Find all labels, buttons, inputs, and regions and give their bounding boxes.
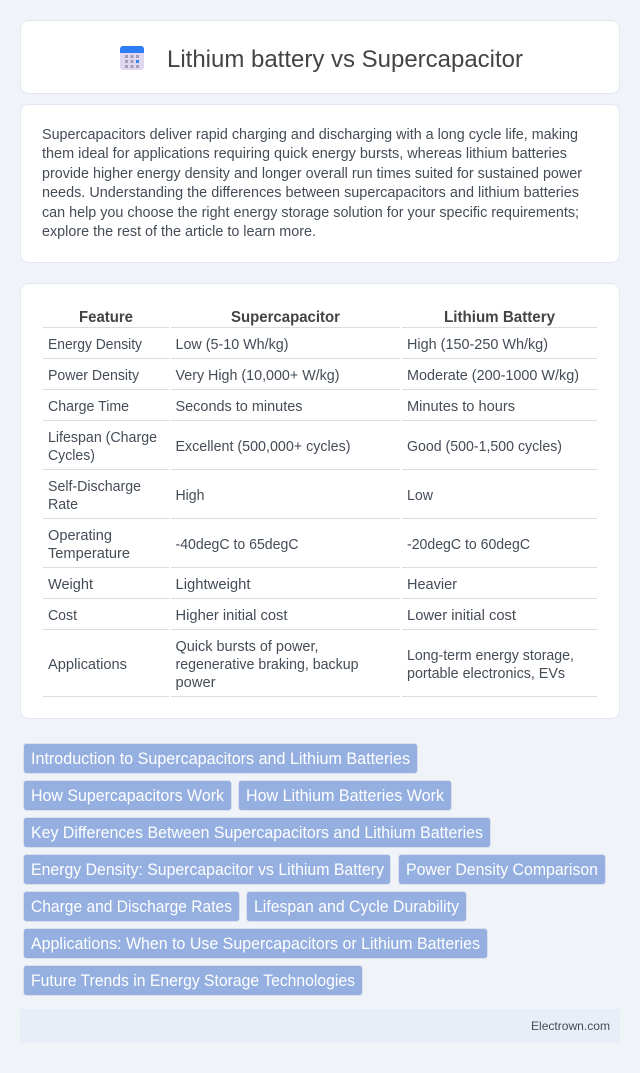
table header: Lithium Battery: [444, 309, 555, 326]
row: applications: Applications: [48, 656, 127, 673]
table header: [79, 309, 555, 326]
intro text: can help you choose the right energy storage solution for your specific requirements;: [42, 204, 579, 221]
row: cost: [48, 607, 517, 624]
intro text: Supercapacitors deliver rapid charging and discharging with a long cycle life, making: [42, 126, 578, 143]
row: charge time: Seconds to minutes: [176, 398, 302, 415]
footer: [20, 1009, 620, 1043]
tag: energy density: Energy Density: Supercapacitor vs Lithium Battery: [31, 861, 385, 879]
tag: lifespan: Lifespan and Cycle Durability: [254, 898, 460, 916]
panel: comparison table: [20, 284, 620, 718]
row: charge time: Minutes to hours: [407, 398, 515, 415]
intro text: explore the rest of the article to learn more.: [42, 223, 316, 240]
row: energy density: Energy Density: [48, 336, 142, 353]
row: operating temperature: -40degC to 65degC: [176, 536, 299, 553]
row: energy density: [48, 336, 548, 353]
row: lifespan: Excellent (500,000+ cycles): [176, 438, 350, 455]
row: cost: Higher initial cost: [176, 607, 288, 624]
tag: how lithium batteries work: How Lithium Batteries Work: [246, 787, 445, 805]
row: self-discharge rate: [48, 478, 433, 513]
row: lifespan: Good (500-1,500 cycles): [407, 438, 562, 455]
tag: introduction: Introduction to Supercapacitors and Lithium Batteries: [31, 750, 410, 768]
row: power density: Very High (10,000+ W/kg): [176, 367, 340, 384]
row: energy density: Low (5-10 Wh/kg): [176, 336, 289, 353]
intro text: needs. Understanding the differences between supercapacitors and lithium batteries: [42, 184, 579, 201]
row: cost: Cost: [48, 607, 78, 624]
row: lifespan: Lifespan (Charge: [48, 429, 157, 446]
tag: energy density: [24, 854, 390, 884]
tag: introduction: [24, 744, 418, 774]
row: power density: [48, 367, 579, 384]
row: operating temperature: -20degC to 60degC: [407, 536, 530, 553]
tag: charge and discharge: Charge and Discharge Rates: [31, 898, 232, 916]
tag: lifespan: [246, 892, 466, 922]
row: operating temperature: Operating: [48, 527, 112, 544]
tag: power density: Power Density Comparison: [406, 861, 598, 879]
row: operating temperature: Temperature: [48, 545, 130, 562]
footer: Electrown.com: [531, 1019, 610, 1033]
row: power density: Moderate (200-1000 W/kg): [407, 367, 579, 384]
row: weight: [48, 576, 457, 593]
row: applications: portable electronics, EVs: [407, 665, 565, 682]
row: lifespan: [48, 429, 562, 464]
row: charge time: [48, 398, 515, 415]
row: applications: [48, 638, 574, 691]
row: self-discharge rate: Self-Discharge: [48, 478, 141, 495]
row: self-discharge rate: Low: [407, 487, 433, 504]
tag: how supercapacitors work: [24, 780, 232, 810]
row: weight: Weight: [48, 576, 94, 593]
intro text: provide higher energy density and longer overall run times suited for sustained power: [42, 165, 582, 182]
tag: future trends: Future Trends in Energy Storage Technologies: [31, 972, 355, 990]
tag: power density: [398, 854, 606, 884]
row: applications: regenerative braking, backup: [176, 656, 358, 673]
table header: Feature: [79, 309, 133, 326]
row: power density: Power Density: [48, 367, 139, 384]
row: weight: Heavier: [407, 576, 457, 593]
row: operating temperature: [48, 527, 530, 562]
row: energy density: High (150-250 Wh/kg): [407, 336, 548, 353]
row: lifespan: Cycles): [48, 447, 95, 464]
header panel: [20, 20, 620, 94]
table rules: [43, 327, 597, 697]
tag: applications: [24, 928, 488, 958]
topic tags: [24, 744, 606, 996]
intro text: [42, 126, 582, 240]
table header: Supercapacitor: [231, 309, 340, 326]
tag: key differences: [24, 818, 490, 848]
tag: how supercapacitors work: How Supercapacitors Work: [31, 787, 225, 805]
row: self-discharge rate: High: [176, 487, 204, 504]
row: cost: Lower initial cost: [407, 607, 517, 624]
row: self-discharge rate: Rate: [48, 496, 78, 513]
icon: calendar: [120, 46, 144, 70]
title: Lithium battery vs Supercapacitor: [167, 46, 523, 73]
row: applications: power: [176, 674, 216, 691]
panel: introduction: [20, 104, 620, 262]
tag: key differences: Key Differences Between Supercapacitors and Lithium Batteries: [31, 824, 483, 842]
row: charge time: Charge Time: [48, 398, 129, 415]
tag: charge and discharge: [24, 892, 240, 922]
row: weight: Lightweight: [176, 576, 251, 593]
tag: how lithium batteries work: [238, 780, 452, 810]
tag: future trends: [24, 966, 362, 996]
row: applications: Quick bursts of power,: [176, 638, 318, 655]
tag: applications: Applications: When to Use Supercapacitors or Lithium Batteries: [31, 935, 480, 953]
intro text: them ideal for applications requiring quick energy bursts, whereas lithium batteries: [42, 145, 567, 162]
row: applications: Long-term energy storage,: [407, 647, 574, 664]
